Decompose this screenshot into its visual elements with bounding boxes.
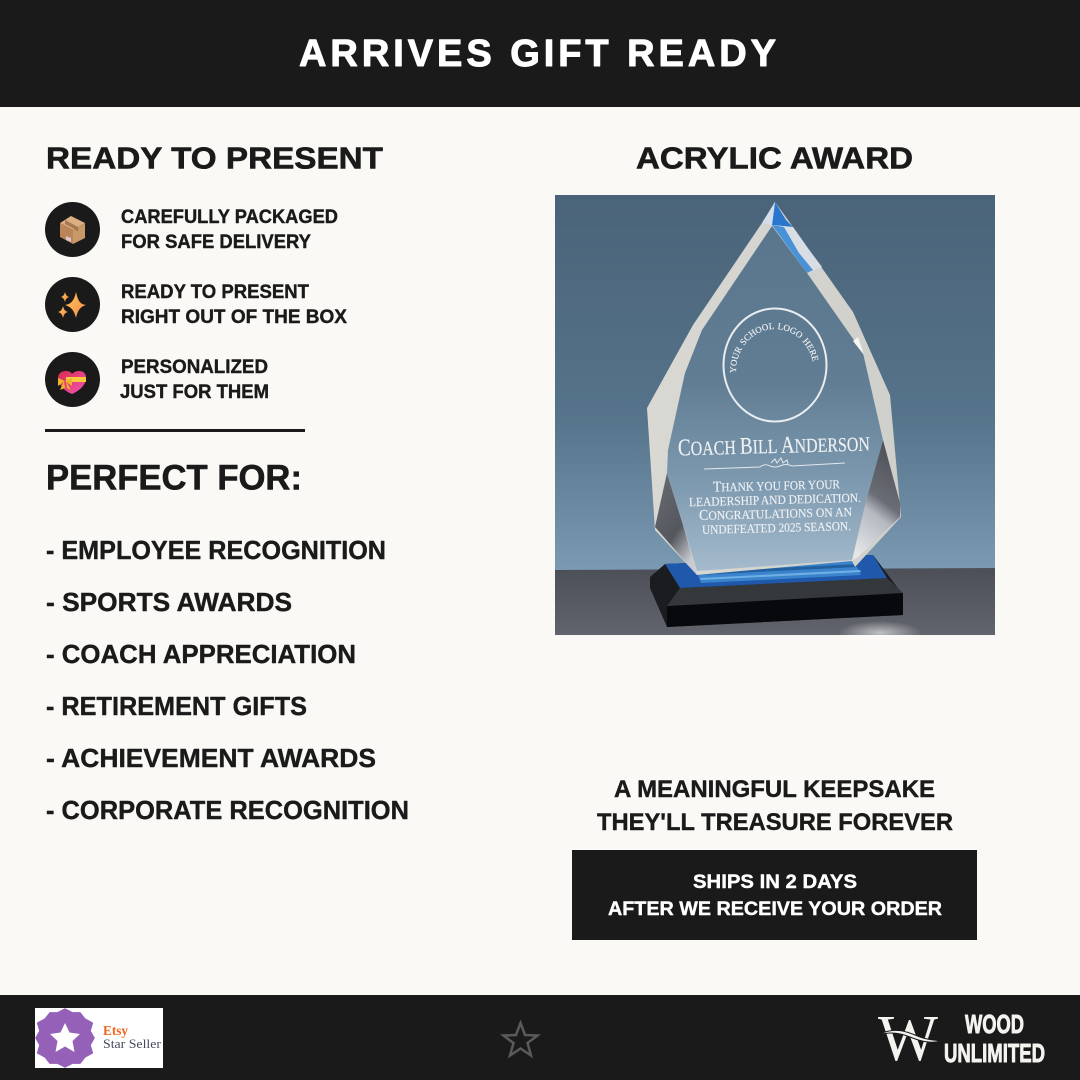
wood unlimited logo [878, 1002, 1045, 1075]
list: occasions: - RETIREMENT GIFTS [46, 691, 307, 721]
feature: carefully packaged [45, 202, 338, 257]
engraved flourish [704, 458, 845, 469]
etsy star seller badge: Star Seller [103, 1037, 162, 1051]
icon: package box [60, 216, 85, 244]
feature: personalized: JUST FOR THEM [120, 381, 269, 403]
shipping callout: AFTER WE RECEIVE YOUR ORDER [608, 898, 942, 920]
right dark facet [852, 440, 900, 561]
header title: ARRIVES GIFT READY [299, 33, 776, 75]
engraved message: THANK YOU FOR YOUR [713, 476, 841, 496]
heading: acrylic award: ACRYLIC AWARD [636, 140, 913, 176]
engraved logo circle: YOUR SCHOOL LOGO HERE [730, 323, 818, 373]
feature: carefully packaged: CAREFULLY PACKAGED [121, 206, 338, 228]
engraved message: UNDEFEATED 2025 SEASON. [702, 519, 851, 537]
engraved message: LEADERSHIP AND DEDICATION. [689, 491, 861, 509]
tagline: THEY'LL TREASURE FOREVER [597, 809, 953, 836]
list: occasions: - CORPORATE RECOGNITION [46, 795, 409, 825]
engraved logo circle [722, 308, 828, 422]
photo: acrylic award trophy [555, 195, 995, 635]
wood unlimited logo: WOOD [965, 1009, 1024, 1039]
tagline [597, 776, 953, 836]
shipping callout: SHIPS IN 2 DAYS [693, 871, 857, 893]
feature: personalized: PERSONALIZED [121, 356, 268, 378]
heading: perfect for: PERFECT FOR: [46, 458, 302, 498]
feature: personalized [45, 352, 269, 407]
etsy star seller badge [35, 1008, 163, 1068]
trophy base [650, 555, 903, 627]
etsy star seller badge: Etsy [103, 1024, 128, 1039]
feature: carefully packaged: FOR SAFE DELIVERY [121, 231, 311, 253]
left dark facet [655, 473, 697, 575]
feature: ready to present [45, 277, 347, 332]
tagline: A MEANINGFUL KEEPSAKE [614, 776, 935, 803]
heading: ready to present: READY TO PRESENT [46, 140, 383, 176]
wood unlimited logo: W [878, 1002, 939, 1075]
header bar [0, 0, 1080, 107]
list: occasions: - COACH APPRECIATION [46, 639, 356, 669]
top blue tip [772, 202, 793, 227]
list: occasions: - EMPLOYEE RECOGNITION [46, 535, 386, 565]
list: occasions [46, 535, 409, 825]
engraved name: COACH BILL ANDERSON [678, 430, 870, 462]
list: occasions: - ACHIEVEMENT AWARDS [46, 743, 376, 773]
feature: ready to present: RIGHT OUT OF THE BOX [121, 306, 347, 328]
icon: sparkles [58, 292, 86, 318]
trophy crystal [647, 202, 901, 575]
shipping callout [572, 850, 977, 940]
icon: heart with ribbon [58, 371, 86, 394]
front face [667, 226, 883, 571]
footer bar [0, 995, 1080, 1080]
icon: outline star [504, 1023, 538, 1056]
engraved message [689, 476, 861, 537]
list: occasions: - SPORTS AWARDS [46, 587, 292, 617]
engraved message: CONGRATULATIONS ON AN [699, 504, 852, 524]
feature: ready to present: READY TO PRESENT [121, 281, 309, 303]
